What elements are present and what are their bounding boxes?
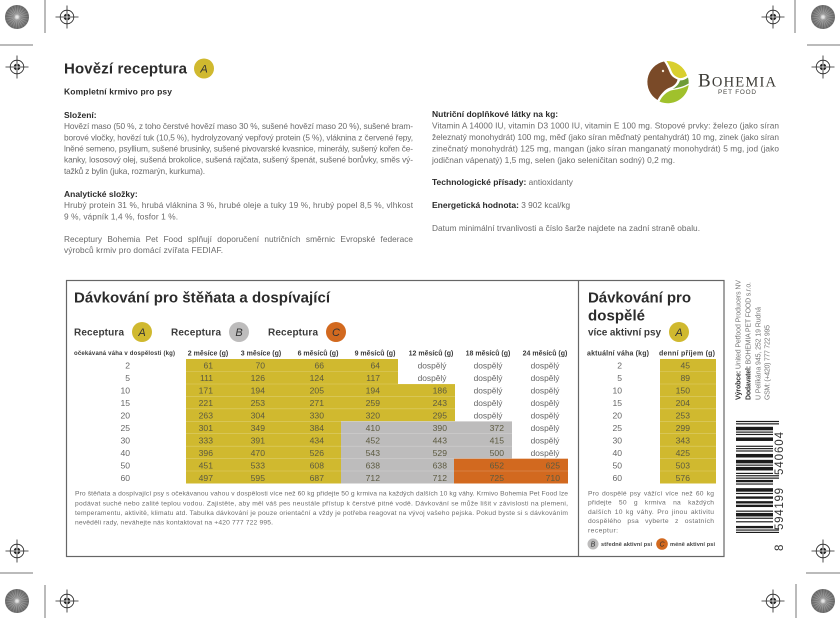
table: puppy feeding: 186 [433,386,447,396]
table: adult feeding: 204 [676,398,690,408]
table: puppy feeding: 595 [251,473,265,483]
table: puppy feeding: dospělý [418,373,447,383]
table: puppy feeding: dospělý [474,410,503,420]
table: puppy feeding: 25 [120,423,130,433]
panel: puppies [74,290,568,526]
table: puppy feeding: 533 [251,460,265,470]
table: adult feeding [587,350,716,484]
table: puppy feeding: dospělý [474,360,503,370]
text block: nutriční doplňkové látky: jodičnan vápenatý) 1,5 mg, selen (jako seleničitan sodný) 0,2 mg. [431,155,675,165]
text block: analytické složky: 9 %, vápník 1,4 %, fosfor 1 %. [64,212,178,222]
legend: other activity: středně aktivní psi [601,542,652,548]
table: puppy feeding: 333 [199,436,213,446]
table: puppy feeding: 205 [310,386,324,396]
text block: analytické složky [64,189,414,222]
barcode digits [774,431,786,551]
note: puppies [75,490,568,526]
icon: sunburst corner mark bottom left [5,589,29,613]
table: puppy feeding: 10 [120,386,130,396]
table: puppy feeding: 608 [310,460,324,470]
subheading with recipe badge [588,322,689,342]
table: puppy feeding: 2 [125,360,130,370]
text block: složení: borové vločky, hovězí tuk (10,5 %), hydrolyzovaný vepřový protein (5 %), vláknina z červené řepy, [64,132,413,142]
table: puppy feeding: 500 [490,448,504,458]
text block: nutriční doplňkové látky: Nutriční doplňkové látky na kg: [432,109,558,119]
icon: dog logo [647,61,689,103]
recipe legend: B [235,327,243,339]
table: adult feeding: 50 [612,460,622,470]
text block: složení: Složení: [64,110,97,120]
table: adult feeding: 25 [612,423,622,433]
table: puppy feeding: 543 [366,448,380,458]
table: puppy feeding: 18 měsíců (g) [466,350,510,358]
text block: složení: lněné semeno, psyllium, sušené brusinky, sušené pivovarské kvasnice, minerály, sušený kořen če- [64,144,413,154]
text block: producer info: U Pelíkána 945, 252 19 Rudná [756,307,762,400]
table: puppy feeding: 295 [433,410,447,420]
table: puppy feeding: 6 měsíců (g) [298,350,338,358]
table: puppy feeding: 652 [490,460,504,470]
table: adult feeding: 20 [612,410,622,420]
subheading with recipe badge: více aktivní psy [588,328,661,338]
table: puppy feeding: 124 [310,373,324,383]
text block: datum: Datum minimální trvanlivosti a číslo šarže najdete na zadní straně obalu. [432,223,700,233]
table: puppy feeding: 111 [200,373,213,383]
table: puppy feeding: 253 [251,398,265,408]
barcode digits: 540604 [774,431,786,475]
table: puppy feeding: 243 [433,398,447,408]
barcode bars [736,421,779,533]
table: puppy feeding: dospělý [474,373,503,383]
icon: sunburst corner mark bottom right [811,589,835,613]
note: puppies: podávat suché nebo zalité teplou vodou. Zajistěte, aby měl váš pes neustále přístup k čerstvé pitné vodě. Dávkování se může lišit v závislosti na plemeni, [75,500,568,508]
legend: other activity: méně aktivní psi [670,542,715,548]
note: puppies: nevěděli rady, neváhejte nás kontaktovat na +420 777 722 995. [75,520,273,526]
table: puppy feeding: 349 [251,423,265,433]
barcode digits: 8 [774,545,786,551]
table: adult feeding: 150 [676,386,690,396]
table: puppy feeding: 50 [120,460,130,470]
heading [588,290,691,324]
recipe legend: A [137,327,146,339]
table: puppy feeding: dospělý [531,423,560,433]
table: puppy feeding: 526 [310,448,324,458]
table: puppy feeding: 452 [366,436,380,446]
table: puppy feeding: 64 [370,360,380,370]
barcode [736,421,786,551]
text block: producer info: Výrobce: United Petfood Producers NV [736,280,742,400]
table: puppy feeding: 40 [120,448,130,458]
recipe legend: C [332,327,340,339]
text block: energetická hodnota: Energetická hodnota: 3 902 kcal/kg [432,200,571,210]
subheading with recipe badge: A [674,327,683,339]
table: adult feeding: 89 [680,373,690,383]
table: adult feeding: 253 [676,410,690,420]
table: puppy feeding: 320 [366,410,380,420]
subtitle: Kompletní krmivo pro psy [64,86,172,96]
table: puppy feeding: 194 [366,386,380,396]
table: adult feeding: 15 [612,398,622,408]
table: adult feeding: 30 [612,436,622,446]
recipe legend: Receptura [171,328,221,338]
barcode digits: 594199 [774,488,786,530]
table: puppy feeding: 259 [366,398,380,408]
table: puppy feeding: 9 měsíců (g) [355,350,395,358]
table: puppy feeding: 470 [251,448,265,458]
table: puppy feeding: dospělý [531,410,560,420]
table: puppy feeding: 410 [366,423,380,433]
note: adults: dospělého psa vyberte z ostatních [588,518,714,525]
table: puppy feeding: 687 [310,473,324,483]
legend: other activity: B [591,542,596,548]
table: puppy feeding: 451 [199,460,213,470]
table: puppy feeding: 263 [199,410,213,420]
text block: producer info [736,280,772,400]
text block: složení: Hovězí maso (50 %, z toho čerstvé hovězí maso 30 %, sušené hovězí maso 20 %), sušené bram- [64,121,413,131]
wordmark: BOHEMIA [698,70,777,92]
recipe legend: Receptura [74,328,124,338]
table: puppy feeding: 5 [125,373,130,383]
table: adult feeding: 2 [617,360,622,370]
table: puppy feeding: dospělý [474,386,503,396]
note: puppies: Pro štěňata a dospívající psy s očekávanou vahou v dospělosti více než 60 kg přidejte 50 g krmiva na každých dalších 10 kg váhy. Krmivo Bohemia Pet Food lze [75,490,568,498]
table: puppy feeding: 638 [433,460,447,470]
text block: producer info: GSM: (+420) 777 722 995 [764,325,772,400]
text block: nutriční doplňkové látky: železnatý monohydrát) 100 mg, měď (jako síran měďnatý pentahydrát) 10 mg, zinek (jako síran [432,132,779,142]
table: puppy feeding: 24 měsíců (g) [523,350,567,358]
text block: FEDIAF: Receptury Bohemia Pet Food splňují doporučení nutričních směrnic Evropské federace [64,234,413,244]
note: adults: přidejte 50 g krmiva na každých [588,500,714,506]
table: puppy feeding: 15 [120,398,130,408]
panel: adults [587,290,716,550]
table: puppy feeding: 221 [199,398,213,408]
table: puppy feeding: 2 měsíce (g) [188,350,228,358]
table: puppy feeding: dospělý [531,386,560,396]
table: puppy feeding: 396 [199,448,213,458]
table: puppy feeding: 61 [203,360,213,370]
heading: Dávkování pro štěňata a dospívající [74,290,331,306]
table: puppy feeding: 712 [366,473,380,483]
table: puppy feeding: 497 [199,473,213,483]
table: puppy feeding: dospělý [531,373,560,383]
table: puppy feeding: 12 měsíců (g) [409,350,453,358]
table: puppy feeding: 126 [251,373,265,383]
table: puppy feeding: 271 [310,398,324,408]
text block: analytické složky: Hrubý protein 31 %, hrubá vláknina 3 %, hrubé oleje a tuky 19 %, hrubý popel 8,5 %, vlhkost [64,200,414,210]
text block: složení: kanky, lososový olej, sušená brokolice, sušená rajčata, sušený špenát, sušené borůvky, směs vý- [64,154,413,164]
table: adult feeding: 10 [612,386,622,396]
table: adult feeding: 60 [612,473,622,483]
table: puppy feeding: 301 [199,423,213,433]
table: puppy feeding: 171 [199,386,213,396]
table: adult feeding: 299 [676,423,690,433]
table: adult feeding: 40 [612,448,622,458]
text block: FEDIAF [64,234,413,255]
table: puppy feeding: 434 [310,436,324,446]
recipe legend [74,322,346,342]
table: puppy feeding: 725 [490,473,504,483]
note: adults: dalších 10 kg váhy. Pro jinou aktivitu [588,509,714,516]
note: adults [588,490,714,534]
table: puppy feeding: 391 [251,436,265,446]
title: A [199,64,208,76]
text block: technologické přísady: Technologické přísady: antioxidanty [432,177,574,187]
table: puppy feeding: dospělý [418,360,447,370]
note: adults: receptur: [588,528,618,534]
table: puppy feeding: 70 [255,360,265,370]
note: adults: Pro dospělé psy vážící více než 60 kg [588,490,714,498]
table: puppy feeding: 372 [490,423,504,433]
text block: nutriční doplňkové látky: zinečnatý monohydrát) 125 mg, mangan (jako síran manganatý monohydrát) 5 mg, jod (jako [432,144,779,154]
text block: složení: tažků z bylin (juka, rozmarýn, kurkuma). [64,166,205,176]
table: puppy feeding: 330 [310,410,324,420]
table: puppy feeding: dospělý [531,360,560,370]
text block: analytické složky: Analytické složky: [64,189,138,199]
table: adult feeding: 45 [680,360,690,370]
icon: sunburst corner mark top left [5,5,29,29]
text block: producer info: Dodavatel: BOHEMIA PET FOOD s.r.o. [746,282,752,400]
table: puppy feeding: 638 [366,460,380,470]
recipe legend: Receptura [268,328,318,338]
heading: dospělé [588,308,645,324]
table: puppy feeding: dospělý [531,398,560,408]
table: puppy feeding: 66 [314,360,324,370]
table: puppy feeding: dospělý [531,448,560,458]
table: puppy feeding: 710 [546,473,560,483]
table: puppy feeding: 30 [120,436,130,446]
table: puppy feeding: 3 měsíce (g) [241,350,281,358]
table: adult feeding: 576 [676,473,690,483]
table: puppy feeding: 20 [120,410,130,420]
wordmark: PET FOOD [718,89,756,96]
table: adult feeding: 503 [676,460,690,470]
table: puppy feeding: 117 [366,373,380,383]
legend: other activity: C [659,542,665,548]
table: puppy feeding: 415 [490,436,504,446]
table: puppy feeding: 384 [310,423,324,433]
table: adult feeding: 5 [617,373,622,383]
text block: nutriční doplňkové látky [431,109,779,165]
text block: složení [64,110,413,176]
table: puppy feeding: 60 [120,473,130,483]
heading: Dávkování pro [588,290,691,306]
table: puppy feeding: 390 [433,423,447,433]
text block: nutriční doplňkové látky: Vitamin A 14000 IU, vitamin D3 1000 IU, vitamin E 100 mg. Stopové prvky: železo (jako síran [432,120,779,130]
table: adult feeding: 425 [676,448,690,458]
logo [647,61,777,103]
table: puppy feeding: dospělý [474,398,503,408]
table: puppy feeding: 625 [546,460,560,470]
table: puppy feeding: očekávaná váha v dospělosti (kg) [74,351,175,357]
table: adult feeding: 343 [676,436,690,446]
panel: dávkování frame [66,280,724,556]
icon: sunburst corner mark top right [811,5,835,29]
table: adult feeding: aktuální váha (kg) [587,350,649,358]
table: puppy feeding: 304 [251,410,265,420]
table: puppy feeding: 194 [251,386,265,396]
table: puppy feeding [74,350,568,484]
table: adult feeding: denní příjem (g) [659,350,715,358]
table: puppy feeding: 712 [433,473,447,483]
title [64,58,214,78]
table: puppy feeding: 443 [433,436,447,446]
legend: other activity [588,538,715,550]
note: puppies: temperamentu, aktivitě, klimatu atd. Tabulka dávkování je pouze orientační a vždy je potřeba reagovat na vývoj vašeho pejska. Pokud byste si s dávkováním [75,510,568,517]
table: puppy feeding: 529 [433,448,447,458]
table: puppy feeding: dospělý [531,436,560,446]
text block: FEDIAF: výrobců krmiv pro domácí zvířata FEDIAF. [64,245,223,255]
title: Hovězí receptura [64,60,188,78]
